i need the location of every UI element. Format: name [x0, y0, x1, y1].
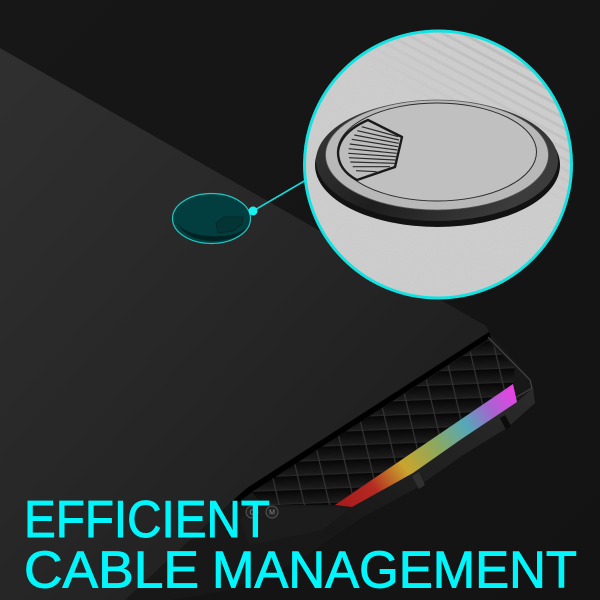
connector line: [248, 180, 306, 216]
grommet inner collar: [326, 100, 548, 210]
fan flap: [338, 120, 402, 180]
mesh vent: [252, 340, 515, 505]
panel button M: [266, 506, 278, 518]
lower nameplate: [240, 507, 350, 545]
grommet cover plate: [338, 103, 536, 201]
lens grain: [304, 31, 572, 299]
title line 1: EFFICIENT: [24, 490, 270, 548]
title line 2: MANAGEMENT: [212, 540, 577, 598]
panel button M: M: [269, 510, 275, 516]
panel rim highlight: [488, 337, 532, 398]
front foot right: [500, 415, 511, 430]
disc lower shadow: [176, 222, 248, 241]
grommet ring base: [315, 103, 560, 227]
title line 2: CABLE: [24, 540, 199, 598]
title: [24, 490, 577, 598]
magnified lens callout: [304, 31, 572, 299]
connector dot: [248, 206, 258, 216]
disc fan flap: [216, 217, 243, 233]
desk surface: [0, 48, 489, 600]
black desk edge: [230, 332, 491, 504]
panel button C: [246, 506, 258, 518]
lens surface: [305, 32, 571, 298]
desk side panel with RGB strip: [125, 332, 535, 600]
carbon weave texture: [410, 32, 569, 162]
grommet ring face: [316, 100, 558, 221]
disc rim: [172, 194, 250, 244]
RGB light strip: [335, 384, 517, 507]
panel button C: C: [249, 510, 255, 516]
front foot left: [412, 472, 425, 489]
panel lower housing: [323, 388, 535, 537]
icon: highlighted grommet on desk: [172, 194, 250, 244]
panel body: [125, 332, 535, 600]
lens border: [304, 31, 572, 298]
